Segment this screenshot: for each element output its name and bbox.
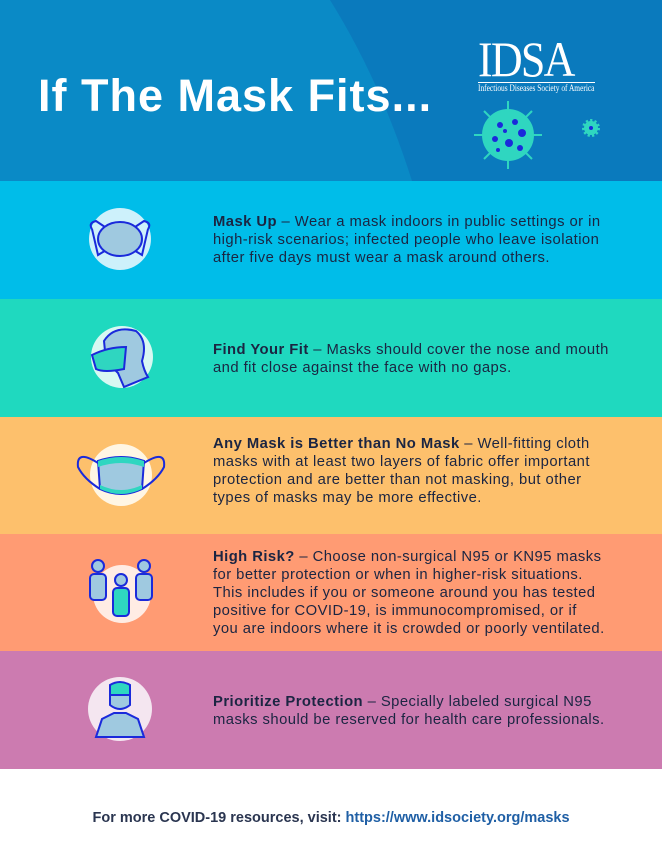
text: any mask: masks with at least two layers of fabric offer important: [213, 454, 590, 470]
text: find your fit: and fit close against the face with no gaps.: [213, 360, 512, 376]
text: any mask: Any Mask is Better than No Mask – Well-fitting cloth: [213, 436, 590, 452]
text: high risk: High Risk? – Choose non-surgical N95 or KN95 masks: [213, 549, 601, 565]
text: mask up: Mask Up – Wear a mask indoors in public settings or in: [213, 214, 601, 230]
text: any mask: types of masks may be more effective.: [213, 490, 482, 506]
icon: people: [89, 559, 153, 623]
text: find your fit: [213, 342, 609, 376]
panel: find your fit: [0, 299, 662, 417]
logo: IDSA: [478, 31, 574, 87]
icon: surgical mask: [76, 444, 166, 506]
text: mask up: [213, 214, 601, 266]
text: high risk: you are indoors where it is crowded or poorly ventilated.: [213, 621, 605, 637]
panel: high risk: [0, 534, 662, 652]
icon: head with mask: [90, 326, 153, 388]
panel: any mask: [0, 417, 662, 535]
text: mask up: high-risk scenarios; infected people who leave isolation: [213, 232, 599, 248]
text: find your fit: Find Your Fit – Masks should cover the nose and mouth: [213, 342, 609, 358]
icon: health worker: [88, 677, 152, 741]
text: high risk: for better protection or when in higher-risk situations.: [213, 567, 583, 583]
text: any mask: protection and are better than not masking, but other: [213, 472, 582, 488]
title: If The Mask Fits...: [38, 70, 432, 121]
text: any mask: [213, 436, 590, 506]
panel: mask up: [0, 181, 662, 299]
text: prioritize: Prioritize Protection – Specially labeled surgical N95: [213, 694, 592, 710]
panel: prioritize protection: [0, 651, 662, 769]
icon: N95: [89, 208, 151, 270]
text: high risk: [213, 549, 605, 637]
header: [0, 0, 662, 181]
text: prioritize: [213, 694, 605, 728]
icon: virus: [474, 101, 600, 169]
text: mask up: after five days must wear a mask around others.: [213, 250, 550, 266]
text: prioritize: masks should be reserved for health care professionals.: [213, 712, 605, 728]
logo: Infectious Diseases Society of America: [478, 84, 594, 94]
text: high risk: This includes if you or someone around you has tested: [213, 585, 595, 601]
footer: For more COVID-19 resources, visit: https://www.idsociety.org/masks: [92, 810, 570, 826]
text: high risk: positive for COVID-19, is immunocompromised, or if: [213, 603, 577, 619]
